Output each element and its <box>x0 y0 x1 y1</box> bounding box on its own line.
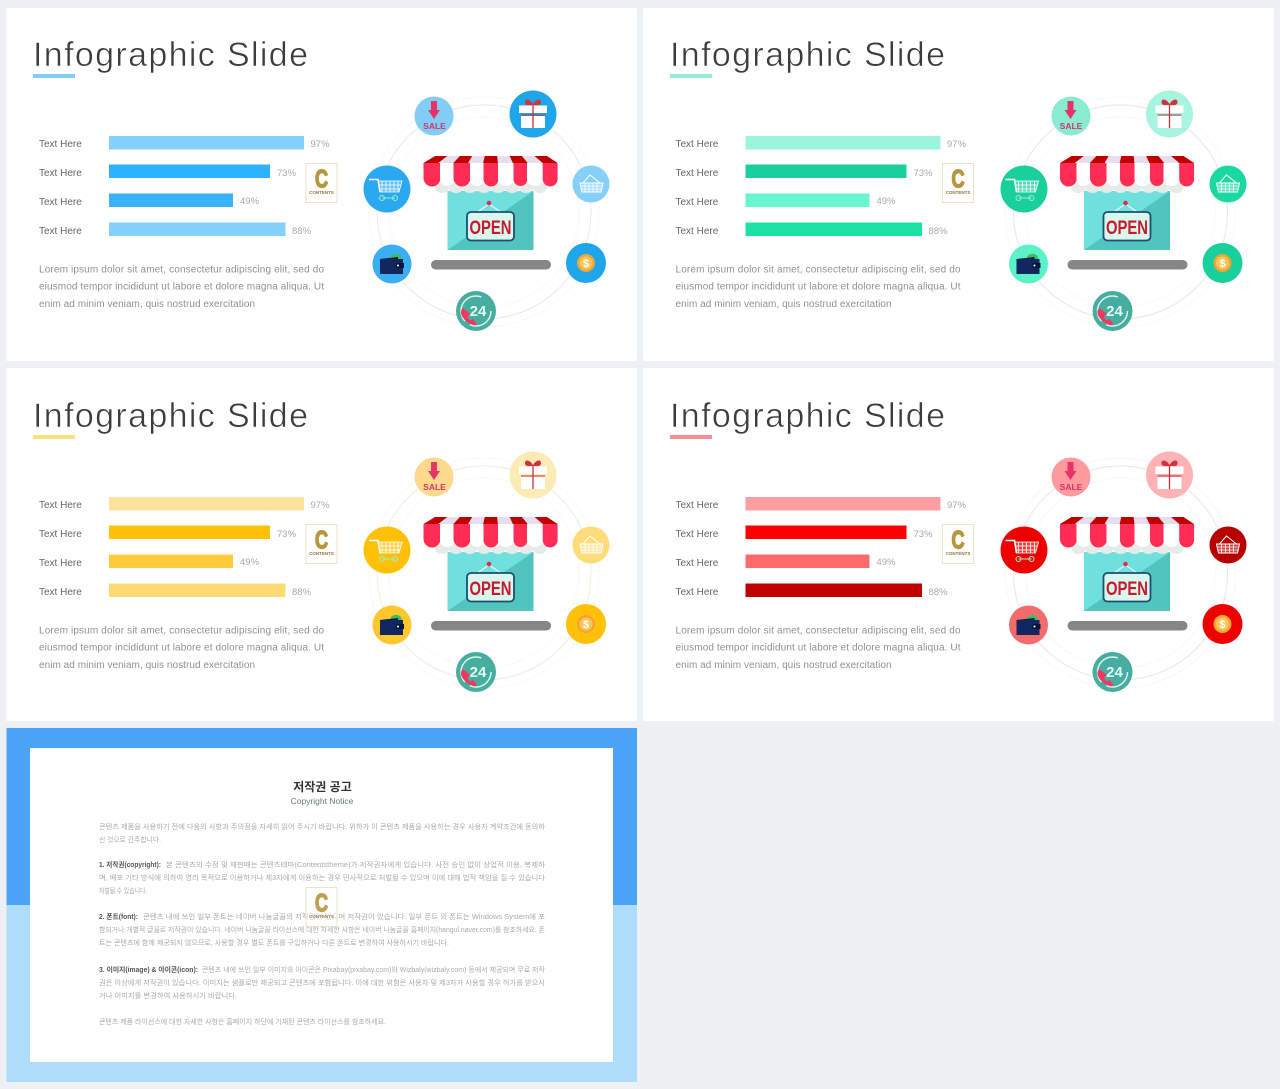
bar chart <box>39 136 330 237</box>
ring <box>1006 97 1236 327</box>
bar chart: 73% <box>277 168 297 179</box>
bar chart: Text Here <box>39 168 82 179</box>
icon: coin: $ <box>583 258 589 270</box>
notice section 3: 콘텐츠 내에 쓰인 일부 이미지와 아이콘은 Pixabay(pixabay.com)와 Wizbaly(wizbaly.com) 등에서 제공되며 무료 저작 <box>202 965 546 974</box>
icon: cart <box>1000 526 1048 574</box>
bar chart: Text Here <box>676 197 719 208</box>
bar chart: Text Here <box>676 168 719 179</box>
bar chart: 49% <box>876 557 896 568</box>
icon: 24 hours: 24 <box>470 664 487 681</box>
logo watermark: CONTENTS <box>309 190 334 195</box>
body text: eiusmod tempor incididunt ut labore et dolore magna aliqua. Ut <box>676 282 961 292</box>
notice section 1: 처벌될 수 있습니다. <box>99 886 147 895</box>
bar chart: Text Here <box>676 529 719 540</box>
logo watermark: C <box>315 890 328 918</box>
bar chart: Text Here <box>39 139 82 150</box>
bar chart: Text Here <box>39 529 82 540</box>
icon: coin: $ <box>1219 258 1226 270</box>
icon: 24 hours <box>456 652 496 692</box>
logo watermark <box>306 164 337 202</box>
store illustration <box>1060 517 1194 630</box>
icon: gift <box>510 452 556 498</box>
notice heading: 저작권 공고 <box>293 779 352 794</box>
icon: sale: SALE <box>1060 482 1083 492</box>
notice section 3: 3. 이미지(image) & 아이콘(icon): <box>99 965 198 974</box>
logo watermark <box>942 164 974 202</box>
notice section 2: 2. 폰트(font): <box>99 913 138 921</box>
logo watermark: C <box>952 526 964 554</box>
title underline <box>33 435 75 439</box>
store illustration <box>1060 156 1194 270</box>
title: Infographic Slide <box>670 397 945 435</box>
body text: enim ad minim veniam, quis nostrud exercitation <box>676 660 892 671</box>
body text: Lorem ipsum dolor sit amet, consectetur adipiscing elit, sed do <box>676 626 961 636</box>
icon: basket <box>572 526 610 564</box>
icon: basket <box>1210 166 1246 202</box>
notice section 1: 1. 저작권(copyright): <box>99 860 161 869</box>
body text: eiusmod tempor incididunt ut labore et dolore magna aliqua. Ut <box>39 282 324 292</box>
icon: cart <box>364 166 410 212</box>
notice section 1: 며, 배포 기타 방식에 의하여 영리 목적으로 이용하거나 제3자에게 이용하는 경우 민사적으로 처벌될 수 있으며 이에 대해 법적 책임을 질 수 있습니다 <box>99 873 546 882</box>
icon: 24 hours <box>1092 291 1132 331</box>
bar chart: Text Here <box>676 139 719 150</box>
icon: wallet <box>1009 244 1048 284</box>
bar chart: Text Here <box>39 500 82 511</box>
bar chart: 97% <box>947 500 967 511</box>
body text: Lorem ipsum dolor sit amet, consectetur adipiscing elit, sed do <box>39 626 324 636</box>
title underline <box>33 74 75 78</box>
ring <box>1006 458 1236 688</box>
icon: sale: SALE <box>423 482 446 492</box>
bar chart: 73% <box>914 529 933 540</box>
icon: gift <box>1146 452 1193 498</box>
logo watermark: CONTENTS <box>946 190 970 195</box>
store illustration: OPEN <box>1106 218 1148 239</box>
bar chart <box>39 497 330 598</box>
panel: red slide <box>643 368 1274 721</box>
icon: sale <box>1052 458 1090 496</box>
notice section 2 <box>99 912 546 947</box>
logo watermark: C <box>315 526 328 554</box>
store illustration <box>424 517 558 630</box>
body text: enim ad minim veniam, quis nostrud exercitation <box>676 299 892 310</box>
panel: green slide <box>643 8 1274 361</box>
bar chart: 73% <box>277 529 297 540</box>
logo watermark: C <box>952 166 964 194</box>
bar chart: 97% <box>310 139 330 150</box>
bar chart: Text Here <box>39 197 82 208</box>
store illustration <box>424 156 558 270</box>
bar chart: Text Here <box>676 587 719 598</box>
icon: coin <box>1202 604 1242 644</box>
bar chart: Text Here <box>39 558 82 569</box>
notice intro: 콘텐츠 제품을 사용하기 전에 다음의 사항과 주의점을 자세히 읽어 주시기 바랍니다. 위하가 이 콘텐츠 제품을 사용하는 경우 사용자 계약조건에 동의하 <box>99 822 546 831</box>
bar chart: Text Here <box>676 500 719 511</box>
notice section 2: 콘텐츠 내에 쓰인 일부 폰트는 네이버 나눔글꼴의 저작권이 있으며 저작권이 있습니다. 일부 폰트 외 폰트는 Windows System에 포 <box>143 912 546 921</box>
body text: enim ad minim veniam, quis nostrud exercitation <box>39 299 255 310</box>
logo watermark <box>306 888 337 926</box>
bar chart: Text Here <box>39 226 82 237</box>
bar chart: 49% <box>240 196 260 207</box>
icon: coin <box>566 604 606 644</box>
icon: sale: SALE <box>1060 121 1083 131</box>
icon: wallet <box>372 244 412 284</box>
title: Infographic Slide <box>33 397 308 435</box>
body text: Lorem ipsum dolor sit amet, consectetur adipiscing elit, sed do <box>676 264 961 276</box>
logo watermark <box>942 524 974 564</box>
bar chart: 73% <box>914 168 933 179</box>
body text: Lorem ipsum dolor sit amet, consectetur adipiscing elit, sed do <box>39 264 324 276</box>
notice subheading: Copyright Notice <box>291 796 354 806</box>
title: Infographic Slide <box>33 36 308 74</box>
notice section 1 <box>99 860 546 895</box>
notice section 1: 본 콘텐츠의 수정 및 재판매는 콘텐츠테마(Contentstheme)가 저작권자에게 있습니다. 사전 승인 없이 상업적 이용, 복제하 <box>166 860 546 869</box>
notice section 3: 거나 이미지를 변경하여 사용하시기 바랍니다. <box>99 991 237 1000</box>
icon: gift <box>510 90 556 138</box>
bar chart: 88% <box>292 226 312 237</box>
panel: copyright notice <box>6 728 637 1082</box>
bar chart: Text Here <box>676 558 719 569</box>
title: Infographic Slide <box>670 36 945 74</box>
notice section 3: 권은 이상에게 저작권이 있습니다. 이미지는 샘플로만 제공되고 콘텐츠에 포함됩니다. 이에 대한 위험은 사용자 및 제3자가 사용할 경우 허가를 받으시 <box>99 978 545 987</box>
icon: coin: $ <box>1219 619 1226 631</box>
icon: 24 hours: 24 <box>470 303 487 320</box>
icon: cart <box>364 526 410 574</box>
icon: cart <box>1000 166 1048 212</box>
bar chart <box>676 497 967 598</box>
bar chart: 88% <box>928 587 948 598</box>
notice intro: 신 것으로 간주합니다. <box>99 835 161 844</box>
icon: sale <box>414 458 454 496</box>
logo watermark: CONTENTS <box>309 551 334 556</box>
bar chart: 49% <box>240 557 260 568</box>
logo watermark <box>306 524 337 564</box>
icon: 24 hours <box>1092 652 1132 692</box>
panel: blue slide <box>6 8 637 361</box>
icon: coin <box>566 243 606 283</box>
body text <box>39 626 324 671</box>
icon: 24 hours: 24 <box>1106 303 1123 320</box>
icon: sale: SALE <box>423 121 446 131</box>
logo watermark: C <box>315 166 328 194</box>
icon: 24 hours <box>456 291 496 331</box>
body text: eiusmod tempor incididunt ut labore et dolore magna aliqua. Ut <box>39 642 324 654</box>
panel: yellow slide <box>6 368 637 721</box>
icon: basket <box>1210 526 1246 564</box>
icon: gift <box>1146 90 1193 138</box>
icon: wallet <box>372 606 412 644</box>
icon: sale <box>1052 96 1090 136</box>
store illustration: OPEN <box>470 579 512 600</box>
bar chart <box>676 136 967 237</box>
icon: basket <box>572 166 610 202</box>
notice section 3 <box>99 965 546 1000</box>
icon: wallet <box>1009 606 1048 644</box>
icon: coin <box>1202 243 1242 283</box>
bar chart: Text Here <box>39 587 82 598</box>
notice section 2: 함되거나 개별적 글꼴로 저작권이 있습니다. 네이버 나눔글꼴 라이선스에 대한 자세한 사항은 네이버 나눔글꼴 홈페이지(hangul.naver.com)를 참조하세요. 폰 <box>99 925 546 934</box>
body text <box>39 264 324 310</box>
notice footer: 콘텐츠 제품 라이선스에 대한 자세한 사항은 홈페이지 하단에 기재된 콘텐츠 라이선스를 참조하세요. <box>99 1017 386 1026</box>
icon: coin: $ <box>583 619 589 631</box>
icon: sale <box>414 96 454 136</box>
ring <box>369 97 599 327</box>
bar chart: Text Here <box>676 226 719 237</box>
bar chart: 88% <box>292 587 312 598</box>
title underline <box>670 435 712 439</box>
ring <box>369 458 599 688</box>
store illustration: OPEN <box>470 218 512 239</box>
body text: eiusmod tempor incididunt ut labore et dolore magna aliqua. Ut <box>676 642 961 654</box>
bar chart: 97% <box>947 139 967 150</box>
body text: enim ad minim veniam, quis nostrud exercitation <box>39 660 255 671</box>
notice section 2: 트는 콘텐츠에 함께 제공되지 않으므로, 사용할 경우 별도 폰트를 구입하거나 다른 폰트로 변경하여 사용하시기 바랍니다. <box>99 938 449 947</box>
bar chart: 88% <box>928 226 948 237</box>
body text <box>676 264 961 310</box>
bar chart: 97% <box>310 500 330 511</box>
icon: 24 hours: 24 <box>1106 664 1123 681</box>
notice intro <box>99 822 546 844</box>
store illustration: OPEN <box>1106 579 1148 600</box>
logo watermark: CONTENTS <box>309 914 334 919</box>
title underline <box>670 74 712 78</box>
body text <box>676 626 961 671</box>
bar chart: 49% <box>876 196 896 207</box>
logo watermark: CONTENTS <box>946 551 970 556</box>
